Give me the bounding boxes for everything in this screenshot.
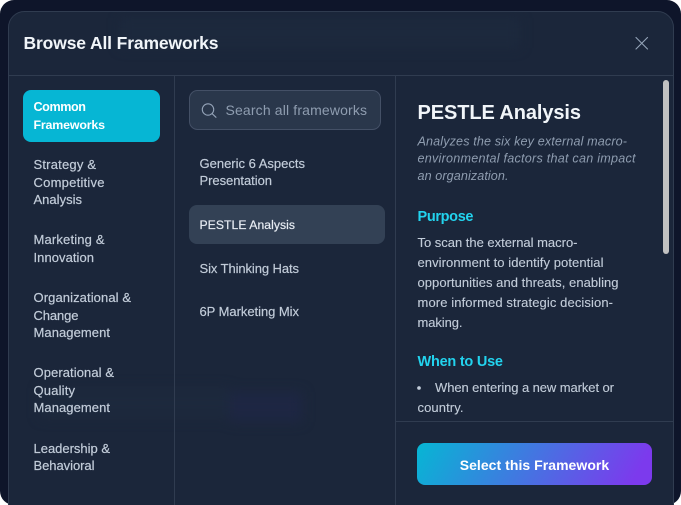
- category: marketing: Innovation: [34, 250, 94, 265]
- bullet: country.: [418, 400, 464, 415]
- when to use heading: When to Use: [418, 354, 503, 370]
- category: strategy: Competitive: [34, 175, 104, 190]
- footer bar: [396, 422, 673, 505]
- list item: PESTLE selected: PESTLE Analysis: [200, 218, 295, 232]
- category: strategy: [34, 157, 104, 207]
- list item: 6P marketing mix: 6P Marketing Mix: [200, 304, 300, 319]
- icon: close: [636, 38, 648, 49]
- purpose text: making.: [418, 315, 462, 330]
- category: leadership: [34, 441, 110, 473]
- bullet: When entering a new market or: [435, 380, 615, 395]
- description: environmental factors that can impact: [418, 152, 636, 166]
- panel: details: [396, 80, 673, 505]
- list item: generic 6 aspects: Presentation: [200, 173, 272, 188]
- list item: generic 6 aspects: [200, 156, 306, 188]
- category: organizational: Management: [34, 325, 110, 340]
- category: marketing: Marketing &: [34, 232, 105, 247]
- purpose text: more informed strategic decision-: [418, 295, 613, 310]
- category: leadership: Leadership &: [34, 441, 110, 456]
- description: an organization.: [418, 169, 508, 183]
- category: organizational: Change: [34, 308, 78, 323]
- icon: search: [202, 104, 216, 117]
- scrollbar: [663, 80, 669, 254]
- purpose text: environment to identify potential: [418, 255, 604, 270]
- title: Browse All Frameworks: [24, 33, 219, 53]
- purpose text: To scan the external macro-: [418, 235, 578, 250]
- details heading: PESTLE Analysis: [418, 102, 581, 124]
- purpose text: opportunities and threats, enabling: [418, 275, 618, 290]
- list item: PESTLE selected: [189, 205, 385, 244]
- purpose text: [418, 235, 618, 330]
- list item: six thinking hats: Six Thinking Hats: [200, 261, 300, 276]
- category: operational: Management: [34, 400, 110, 415]
- select button: Select this Framework: [460, 457, 609, 473]
- active category: Frameworks: [34, 118, 105, 132]
- category: organizational: [34, 290, 131, 340]
- search box: [190, 90, 380, 130]
- category: strategy: Analysis: [34, 192, 82, 207]
- bullet: [417, 380, 615, 415]
- purpose heading: Purpose: [418, 209, 474, 225]
- panel: categories: [23, 90, 160, 473]
- header divider: [9, 74, 673, 76]
- category: organizational: Organizational &: [34, 290, 131, 305]
- category: operational: Quality: [34, 383, 76, 398]
- active category: Common: [34, 100, 86, 114]
- category: operational: [34, 365, 114, 415]
- description: [416, 134, 636, 183]
- category: leadership: Behavioral: [34, 458, 95, 473]
- select button: [417, 443, 652, 485]
- description: Analyzes the six key external macro-: [416, 134, 627, 148]
- panel: framework list: [189, 90, 385, 319]
- list item: generic 6 aspects: Generic 6 Aspects: [200, 156, 306, 171]
- category: marketing: [34, 232, 105, 265]
- search box: Search all frameworks: [226, 102, 367, 118]
- category: operational: Operational &: [34, 365, 114, 380]
- category: strategy: Strategy &: [34, 157, 96, 172]
- active category: [23, 90, 160, 142]
